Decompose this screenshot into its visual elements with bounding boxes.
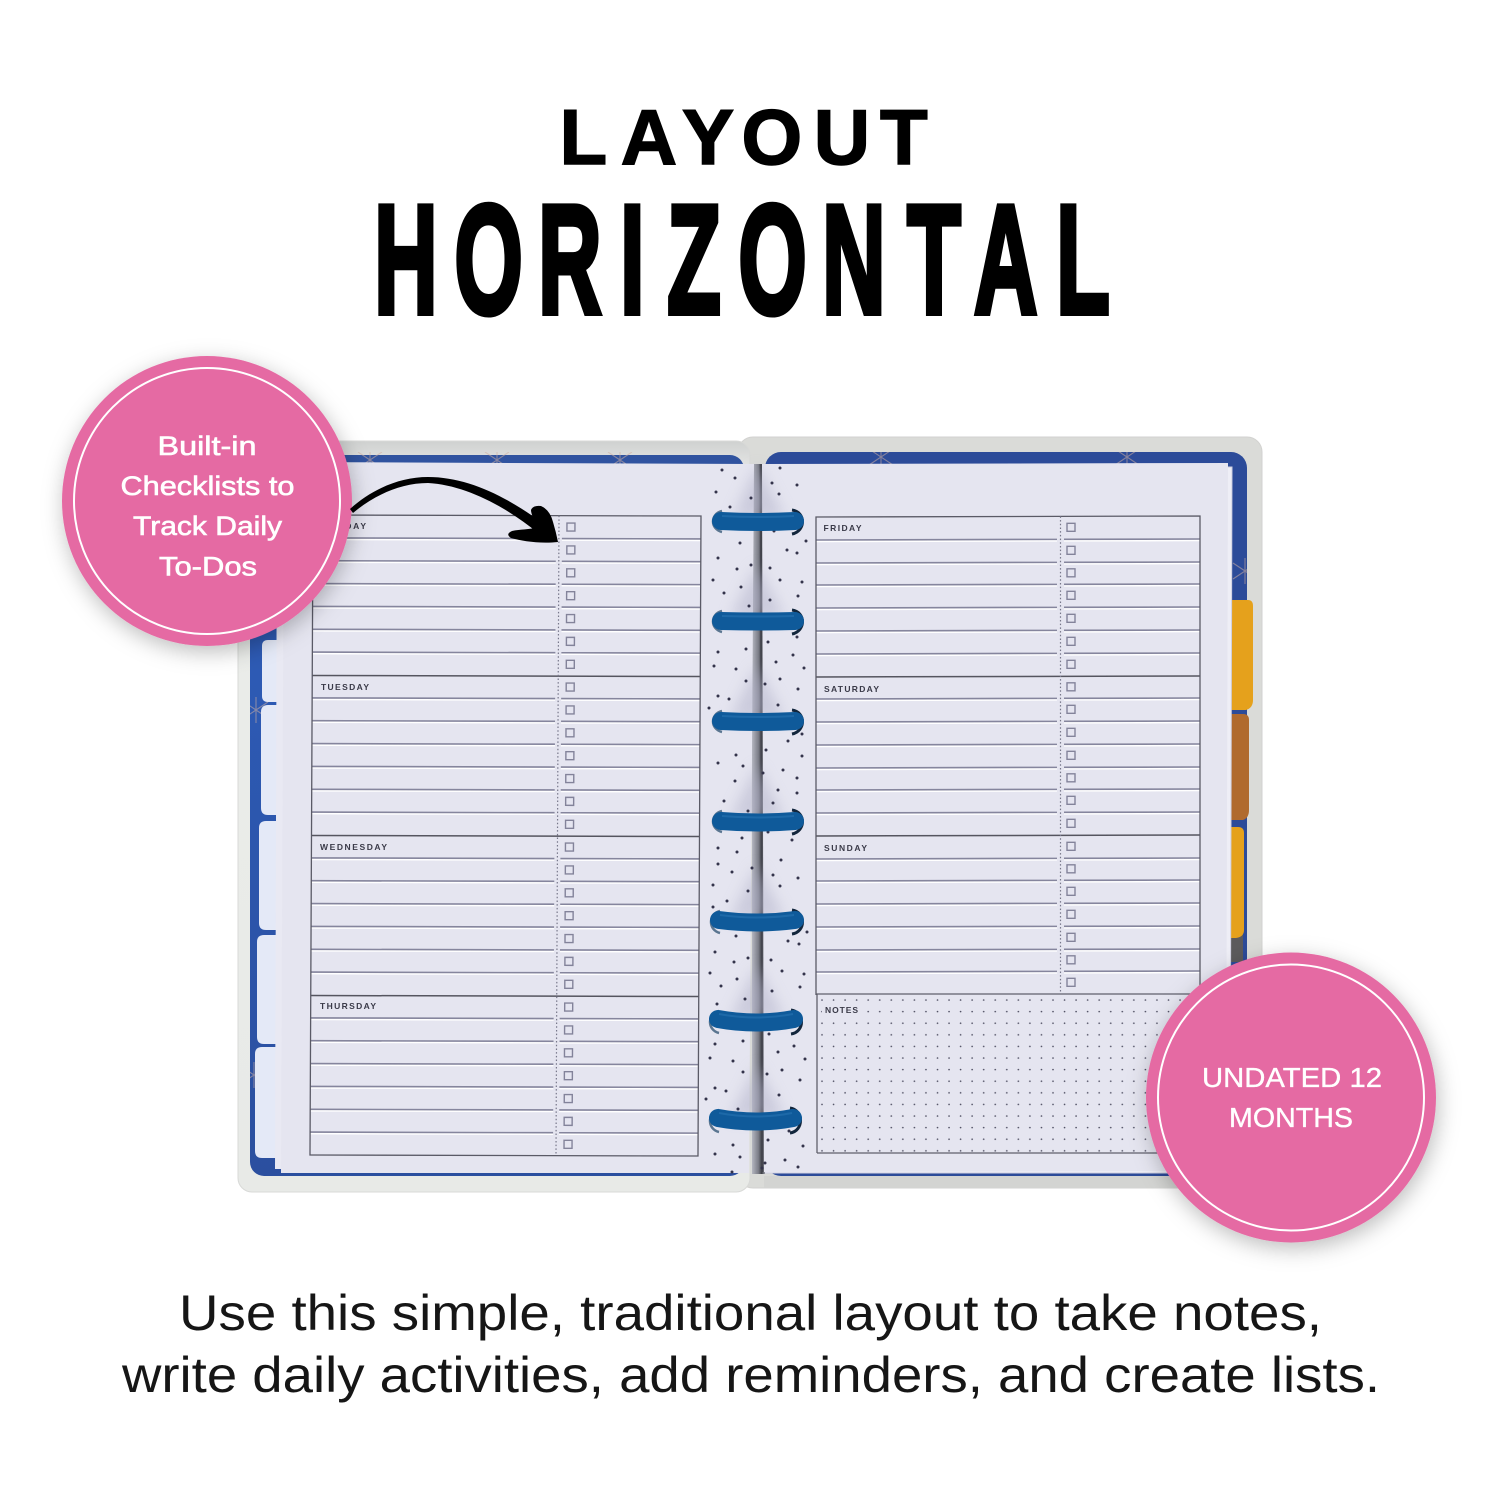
left page stack [275,470,700,1169]
circle badge [1146,952,1436,1242]
right cover frame [738,437,1262,1188]
day separators [816,676,1200,836]
table outline [310,515,701,1156]
ring 4 [713,810,802,834]
inner ring [1158,964,1424,1230]
notes outline [817,994,1198,1153]
sunday label: SUNDAY [824,843,867,853]
row lines [310,538,701,1133]
ring 1 [713,510,802,534]
tab 2 [261,705,290,815]
callout text [1202,1062,1382,1133]
arrow shaft [350,477,545,533]
ring 3 [713,710,802,734]
callout text [120,431,294,582]
dot grid fill [818,995,1198,1152]
callout text: MONTHS [1229,1102,1353,1133]
left cover frame [238,441,750,1192]
callout: undated 12 months [1146,952,1436,1242]
title: HORIZONTAL: HORIZONTAL [374,173,1110,346]
notes label background [822,1003,862,1015]
callout text: To-Dos [159,552,257,582]
thursday label: THURSDAY [320,1001,376,1011]
binder rings [710,510,802,1133]
right cover blue lining [765,452,1247,1176]
callout: built-in checklists [62,356,352,646]
left page schedule table [310,515,701,1156]
right divider tabs [1226,590,1253,962]
monday label: MONDAY [320,521,366,531]
callout text: Track Daily [133,511,283,541]
title: LAYOUT: LAYOUT [560,93,928,181]
tab 5 [255,1047,290,1158]
checkboxes [564,523,575,1148]
checkboxes [1067,523,1075,986]
description text [121,1285,1380,1403]
yellow tab 2 [1226,827,1244,938]
cover star motifs [242,444,1257,1088]
callout text: Checklists to [120,471,294,501]
notes dot grid [817,994,1198,1153]
right page schedule table [816,516,1200,995]
line highlights [816,540,1200,973]
friday label: FRIDAY [824,523,862,533]
row lines [816,539,1200,972]
spine line [760,464,762,1172]
ring 5 [711,910,802,934]
left page day labels [320,521,387,1011]
arrow to checklist column [350,477,558,543]
left cover blue lining [250,455,744,1176]
ring shadows [730,465,785,1118]
strip dots [706,468,807,1172]
tab 3 [259,821,290,930]
left divider tabs [255,640,290,1158]
planner illustration [238,437,1262,1192]
table outline [816,516,1200,995]
line highlights [310,539,701,1135]
right page day labels [824,523,879,853]
brown tab [1226,714,1249,820]
ring 7 [710,1108,800,1133]
right page [762,463,1228,1172]
dark tab [1226,935,1243,962]
circle badge [62,356,352,646]
left page [281,462,754,1173]
checklist divider [556,516,559,1156]
arrow head [508,506,558,543]
callout text: UNDATED 12 [1202,1062,1382,1093]
tab 4 [257,935,290,1044]
gutter [752,464,765,1174]
tab 1 [262,640,290,702]
yellow tab 1 [1226,590,1253,710]
line 1: Use this simple, traditional layout to take notes, [179,1285,1322,1341]
line 2: write daily activities, add reminders, and create lists. [121,1347,1380,1403]
day separators [311,676,700,997]
right page stack [764,467,1232,1173]
ring 2 [713,610,802,634]
inner ring [74,368,340,634]
notes label: NOTES [825,1005,858,1015]
ring 6 [710,1010,802,1034]
saturday label: SATURDAY [824,684,879,694]
tuesday label: TUESDAY [321,682,369,692]
checklist divider [1060,516,1062,994]
callout text: Built-in [158,431,256,461]
right frame lower band shade [764,1176,1200,1188]
wednesday label: WEDNESDAY [320,842,387,852]
